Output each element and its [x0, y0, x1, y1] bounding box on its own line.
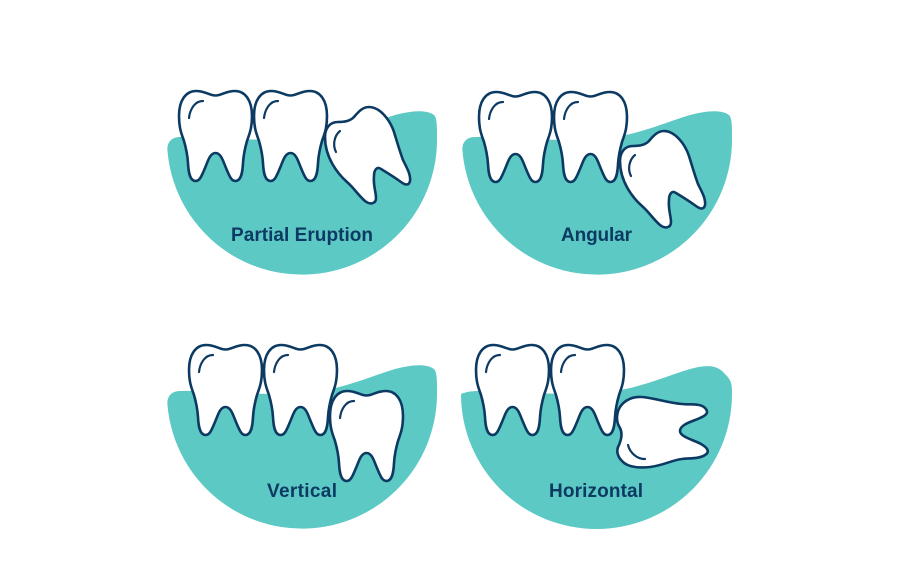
tooth: second molar — [551, 345, 624, 435]
gum: partial eruption — [167, 111, 437, 275]
panel: horizontal — [461, 345, 732, 529]
tooth: angled wisdom tooth — [620, 131, 705, 227]
tooth: first molar — [479, 92, 552, 182]
gum: vertical — [167, 365, 437, 529]
tooth: first molar — [476, 345, 549, 435]
gum: angular — [462, 111, 732, 275]
gum: horizontal — [461, 366, 732, 529]
tooth: second molar — [554, 92, 627, 182]
panel: angular — [462, 92, 732, 275]
tooth: second molar — [264, 345, 337, 435]
panel: partial eruption — [167, 91, 437, 275]
tooth: vertical wisdom tooth — [330, 391, 403, 481]
panel: vertical — [167, 345, 437, 529]
tooth: horizontal wisdom tooth — [617, 397, 708, 467]
label: horizontal: Horizontal — [549, 481, 643, 502]
label: angular: Angular — [561, 225, 633, 246]
tooth: partially erupted wisdom tooth — [325, 107, 410, 203]
tooth: first molar — [189, 345, 262, 435]
label: vertical: Vertical — [267, 481, 337, 502]
label: partial eruption: Partial Eruption — [231, 225, 373, 246]
tooth: second molar — [254, 91, 327, 181]
tooth: first molar — [179, 91, 252, 181]
